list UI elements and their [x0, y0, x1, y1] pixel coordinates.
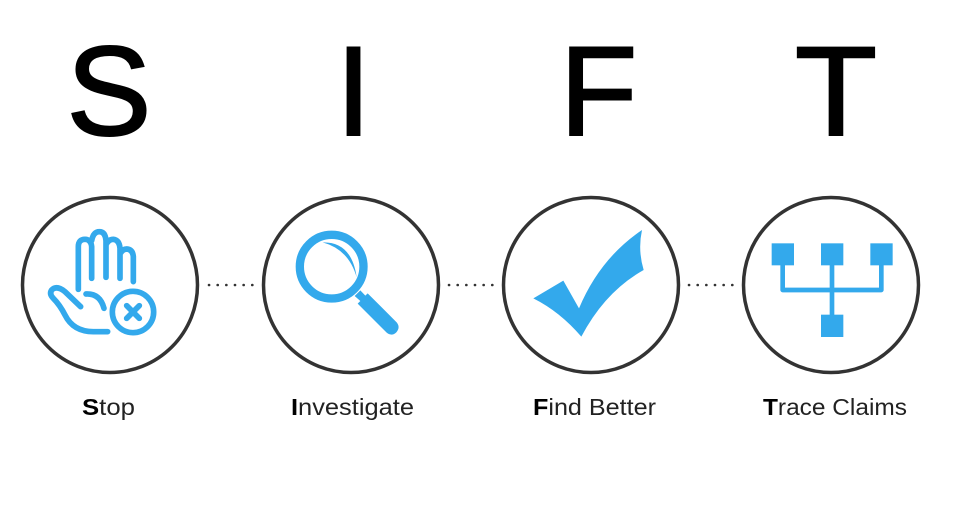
- title letter T: T: [795, 20, 877, 162]
- label: Stop: Stop: [82, 394, 135, 420]
- icon: raised hand with x: [51, 232, 154, 333]
- step: investigate: [264, 198, 438, 420]
- dotted connector 1: [209, 284, 252, 286]
- title letter F: F: [560, 20, 637, 162]
- dotted connector 2: [449, 284, 492, 286]
- label: Trace Claims: Trace Claims: [763, 394, 907, 420]
- step: find better: [504, 198, 678, 420]
- circle outline: find better: [504, 198, 678, 372]
- label: Investigate: Investigate: [291, 394, 414, 420]
- icon: magnifying glass: [300, 235, 399, 335]
- icon: check mark: [533, 230, 644, 337]
- label: Find Better: Find Better: [533, 394, 656, 420]
- dotted connector 3: [689, 284, 732, 286]
- circle outline: stop: [22, 198, 198, 372]
- step: stop: [22, 198, 198, 420]
- title letter S: S: [67, 20, 151, 162]
- title letter I: I: [336, 20, 371, 162]
- icon: tree diagram: [772, 243, 893, 337]
- circle outline: investigate: [264, 198, 438, 372]
- circle outline: trace claims: [744, 198, 918, 372]
- step: trace claims: [744, 198, 918, 420]
